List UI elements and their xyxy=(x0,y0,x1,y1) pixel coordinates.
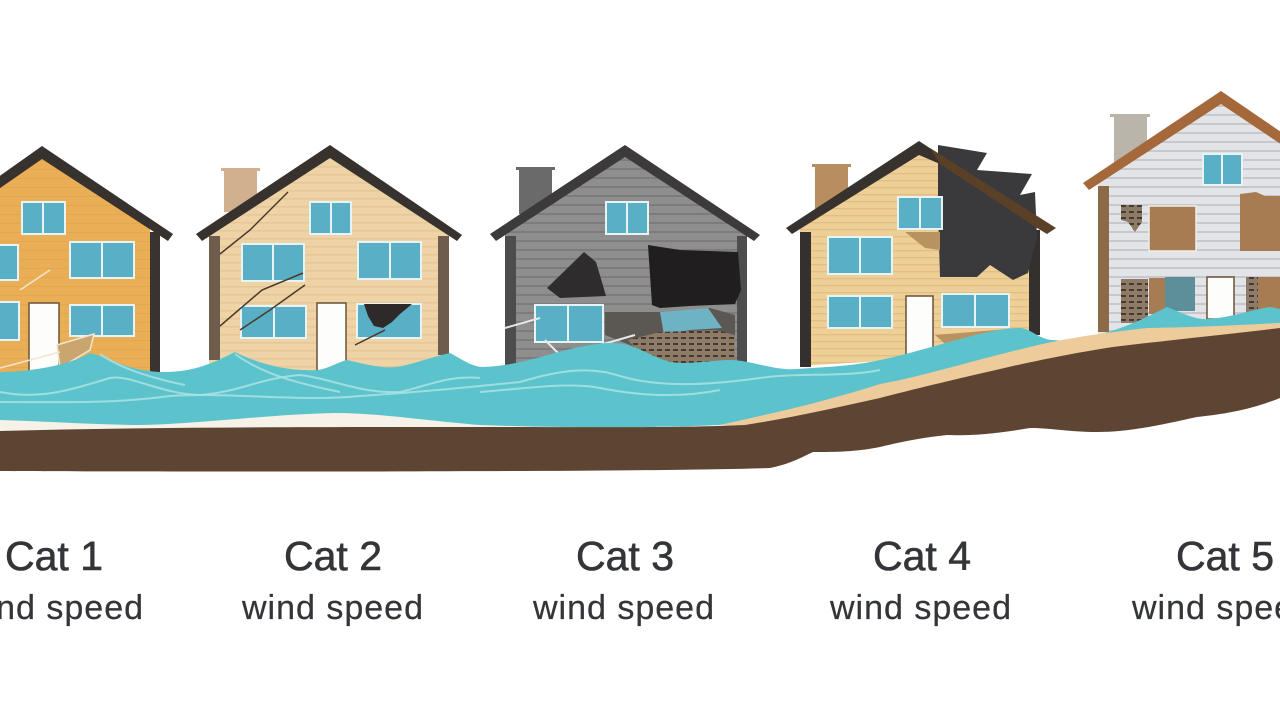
Cat 1 windows xyxy=(0,202,134,340)
Cat 1 walls xyxy=(0,152,150,372)
Cat 3 top window xyxy=(606,202,648,234)
Cat 3 walls xyxy=(505,150,747,372)
Cat 4 chimney xyxy=(812,164,851,209)
Cat 1 roof xyxy=(0,146,173,241)
Cat 4 windows xyxy=(828,197,1009,328)
Cat 3 large hole xyxy=(648,245,741,308)
Cat 1 heading: Cat 1 xyxy=(5,533,103,579)
Cat 1 side wall xyxy=(150,232,160,372)
Cat 4 walls xyxy=(800,147,1030,366)
Cat 2 wind cracks xyxy=(220,192,385,345)
label: Cat 3 xyxy=(532,533,715,627)
Cat 2 side walls xyxy=(209,236,449,360)
Cat 3 chimney xyxy=(516,167,555,214)
house: Cat 4 xyxy=(786,141,1056,367)
Cat 1 debris xyxy=(0,270,94,368)
Cat 3 debris xyxy=(628,330,735,366)
Cat 5 boarded openings xyxy=(1149,192,1280,315)
Cat 4 wind speed: wind speed xyxy=(829,589,1012,627)
Cat 1 door xyxy=(29,303,59,371)
Cat 4 roof shards xyxy=(938,145,1037,280)
Cat 3 broken beams xyxy=(505,318,635,355)
Cat 3 wind speed: wind speed xyxy=(532,589,715,627)
Cat 3 lower window xyxy=(535,305,603,342)
label: Cat 4 xyxy=(829,533,1012,627)
Cat 3 exposed wall xyxy=(605,308,735,362)
Cat 4 heading: Cat 4 xyxy=(873,533,971,579)
Cat 2 chimney xyxy=(221,168,260,212)
Cat 4 right side wall xyxy=(1029,230,1040,335)
Cat 5 door xyxy=(1207,277,1234,319)
Cat 4 left side wall xyxy=(800,232,811,367)
Cat 3 roof xyxy=(490,145,760,241)
Cat 3 blue torn panel xyxy=(660,308,722,335)
ground xyxy=(0,328,1280,472)
Cat 2 roof xyxy=(196,145,462,241)
house: Cat 1 xyxy=(0,146,173,372)
Cat 3 side walls xyxy=(505,236,747,365)
label: Cat 2 xyxy=(241,533,424,627)
label: Cat 1 xyxy=(0,533,144,627)
Cat 5 side wall xyxy=(1098,186,1109,332)
Cat 4 roof xyxy=(786,141,942,234)
Cat 5 top window xyxy=(1203,154,1242,185)
water surge xyxy=(0,307,1280,427)
house: Cat 2 xyxy=(196,145,462,372)
Cat 2 door xyxy=(317,303,346,371)
Cat 2 walls xyxy=(209,150,449,372)
Cat 5 exposed brick patches xyxy=(1121,205,1258,323)
Cat 2 windows xyxy=(241,202,421,338)
label: Cat 5 xyxy=(1131,533,1280,627)
Cat 2 heading: Cat 2 xyxy=(284,533,382,579)
sand layer xyxy=(720,323,1280,430)
Cat 5 walls xyxy=(1098,97,1280,335)
Cat 3 heading: Cat 3 xyxy=(576,533,674,579)
house: Cat 5 xyxy=(1083,91,1280,335)
Cat 3 triangular hole xyxy=(547,252,606,298)
Cat 5 roof xyxy=(1083,91,1280,190)
Cat 5 broken lower window xyxy=(1165,277,1195,311)
Cat 4 exposed bricks xyxy=(905,232,1020,348)
house: Cat 3 xyxy=(490,145,760,372)
Cat 2 wind speed: wind speed xyxy=(241,589,424,627)
white shoreline under water xyxy=(0,405,720,435)
Cat 4 brown roof edge xyxy=(930,148,1056,234)
Cat 5 chimney xyxy=(1110,114,1150,162)
Cat 2 broken window xyxy=(364,304,412,328)
Cat 5 heading: Cat 5 xyxy=(1176,533,1274,579)
water highlights xyxy=(0,354,880,402)
Cat 4 door xyxy=(906,296,933,360)
